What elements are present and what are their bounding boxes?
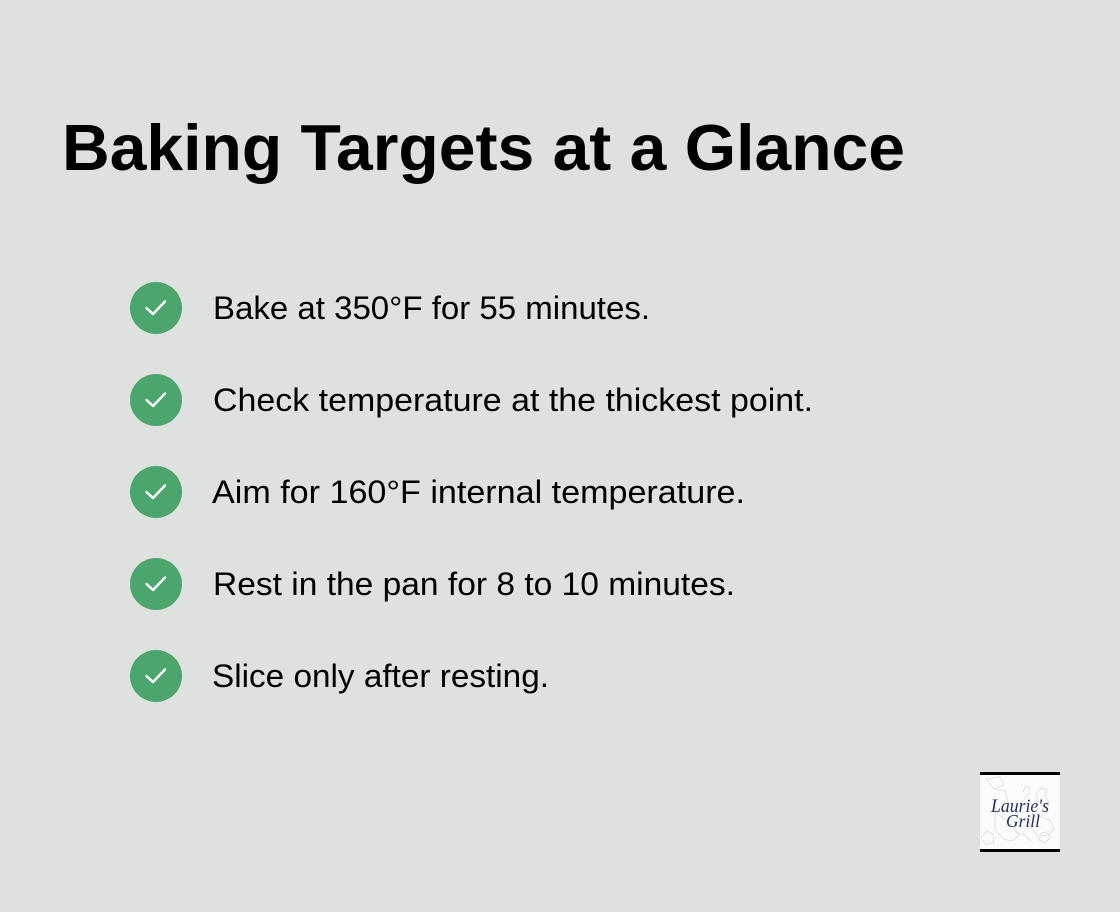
text: rest: Rest in the pan for 8 to 10 minutes. xyxy=(213,566,735,602)
title: Baking Targets at a Glance xyxy=(62,111,905,184)
icon: green check xyxy=(130,466,182,518)
icon: green check xyxy=(130,558,182,610)
item 1: bake time xyxy=(130,282,650,334)
logo sketch doodles xyxy=(981,777,1054,845)
logo wordmark: Grill xyxy=(1006,811,1040,831)
item 3: internal temperature xyxy=(130,466,745,518)
item 5: slice xyxy=(130,650,549,702)
text: aim: Aim for 160°F internal temperature. xyxy=(212,474,745,510)
icon: green check xyxy=(130,650,182,702)
item 2: check temperature xyxy=(130,374,813,426)
icon: green check xyxy=(130,374,182,426)
text: slice: Slice only after resting. xyxy=(212,658,549,694)
logo wordmark: Laurie's xyxy=(990,796,1049,817)
checklist xyxy=(130,282,813,702)
logo: Laurie's Grill xyxy=(980,772,1060,852)
text: check: Check temperature at the thickest point. xyxy=(213,382,813,418)
icon: green check xyxy=(130,282,182,334)
text: bake: Bake at 350°F for 55 minutes. xyxy=(213,290,650,326)
logo wordmark xyxy=(990,796,1049,831)
item 4: rest xyxy=(130,558,735,610)
